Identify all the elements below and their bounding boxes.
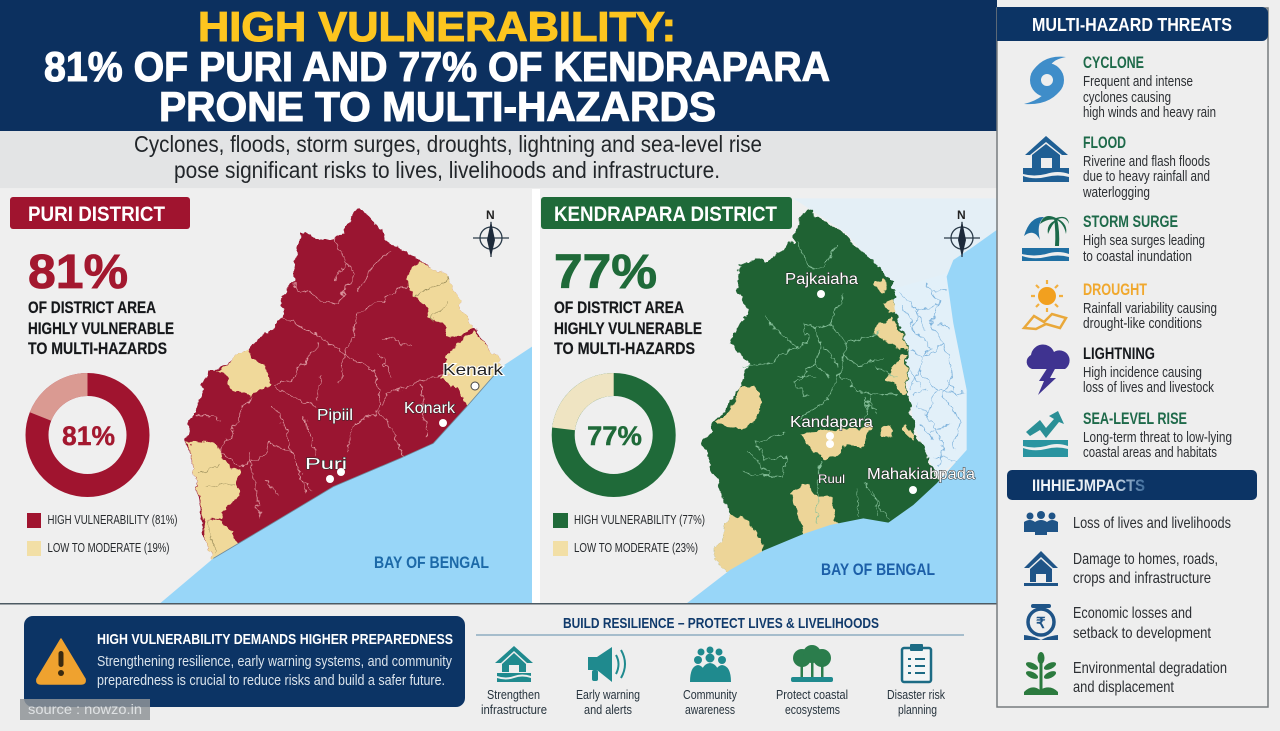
threat: sea-level rise: Long-term threat to low-lying bbox=[1083, 430, 1232, 446]
legend bbox=[553, 513, 705, 556]
threat: drought bbox=[1083, 281, 1217, 332]
subtitle band: Cyclones, floods, storm surges, droughts, lightning and sea-level rise bbox=[134, 131, 762, 157]
action: early warning: and alerts bbox=[584, 703, 632, 717]
icon: economic loss bbox=[1024, 604, 1058, 640]
threat: flood bbox=[1082, 134, 1210, 201]
threat: lightning: LIGHTNING bbox=[1083, 345, 1155, 363]
map labels: Pajkaiaha bbox=[785, 271, 858, 288]
icon: people bbox=[1024, 511, 1058, 535]
icon: economic loss: ₹ bbox=[1036, 615, 1046, 632]
legend: HIGH VULNERABILITY (81%) bbox=[48, 513, 178, 527]
icon: drought bbox=[1024, 280, 1066, 329]
callout: preparedness: preparedness is crucial to reduce risks and build a safer future. bbox=[97, 672, 445, 689]
map labels bbox=[785, 271, 975, 494]
threat: sea-level rise: coastal areas and habitats bbox=[1083, 445, 1217, 461]
callout: preparedness: Strengthening resilience, early warning systems, and community bbox=[97, 653, 452, 670]
impacts heading: IIHHIEJMPACTS bbox=[1032, 476, 1145, 495]
threat: flood: waterlogging bbox=[1082, 185, 1150, 201]
threat: storm surge bbox=[1083, 213, 1205, 265]
resilience heading: BUILD RESILIENCE – PROTECT LIVES & LIVELIHOODS bbox=[563, 615, 879, 632]
sea bbox=[687, 230, 997, 603]
threat: lightning bbox=[1083, 345, 1215, 396]
map labels: Puri bbox=[305, 456, 347, 473]
threat: drought: drought-like conditions bbox=[1083, 316, 1202, 332]
title bbox=[44, 3, 830, 130]
impact: environment: Environmental degradation bbox=[1073, 660, 1227, 677]
threat: lightning: High incidence causing bbox=[1083, 365, 1202, 381]
big stat: 77% bbox=[554, 246, 657, 299]
district badge: PURI DISTRICT bbox=[28, 203, 165, 226]
impact: damage: crops and infrastructure bbox=[1073, 570, 1211, 587]
threat: flood: Riverine and flash floods bbox=[1083, 154, 1210, 170]
sea label: BAY OF BENGAL bbox=[821, 560, 935, 579]
stat description: HIGHLY VULNERABLE bbox=[554, 319, 702, 338]
map labels: Kenark bbox=[443, 362, 504, 379]
legend bbox=[27, 513, 178, 556]
impact: economic bbox=[1073, 605, 1211, 642]
panel: Kendrapara district bbox=[532, 189, 997, 603]
Kendrapara map bbox=[687, 198, 997, 603]
impact: environment bbox=[1073, 660, 1227, 696]
action: community awareness: Community bbox=[683, 688, 738, 702]
district badge: KENDRAPARA DISTRICT bbox=[554, 203, 777, 226]
title: PRONE TO MULTI-HAZARDS bbox=[159, 83, 716, 130]
threat: storm surge: to coastal inundation bbox=[1083, 249, 1192, 265]
source watermark: source : nowzo.in bbox=[28, 701, 142, 717]
legend: HIGH VULNERABILITY (77%) bbox=[574, 513, 705, 527]
delta bbox=[890, 273, 967, 477]
threat: drought: DROUGHT bbox=[1083, 281, 1147, 299]
Puri map bbox=[160, 207, 532, 603]
donut chart: 81% bbox=[62, 421, 115, 451]
title: HIGH VULNERABILITY: bbox=[198, 3, 676, 50]
legend: LOW TO MODERATE (23%) bbox=[574, 541, 698, 555]
impact: economic: Economic losses and bbox=[1073, 605, 1192, 622]
impact: lives: Loss of lives and livelihoods bbox=[1073, 515, 1231, 532]
icon: lightning bbox=[1027, 345, 1070, 395]
icon: flood bbox=[1023, 136, 1069, 182]
top tint bbox=[793, 198, 997, 290]
icon: sea-level rise bbox=[1023, 411, 1068, 457]
sea bbox=[160, 347, 532, 603]
action: disaster risk planning: Disaster risk bbox=[887, 688, 946, 702]
impact: economic: setback to development bbox=[1073, 625, 1211, 642]
district badge bbox=[541, 197, 792, 229]
delta channels bbox=[900, 283, 963, 467]
stat description: OF DISTRICT AREA bbox=[554, 298, 684, 317]
compass: N bbox=[486, 208, 495, 222]
stat description: OF DISTRICT AREA bbox=[28, 298, 156, 317]
callout: preparedness: HIGH VULNERABILITY DEMANDS HIGHER PREPAREDNESS bbox=[97, 631, 453, 648]
impacts heading bbox=[1007, 470, 1257, 500]
threat: cyclone: CYCLONE bbox=[1083, 54, 1144, 72]
action: disaster risk planning bbox=[887, 644, 946, 717]
action: protect coastal ecosystems: ecosystems bbox=[785, 703, 840, 717]
icon: cyclone bbox=[1024, 57, 1066, 104]
map labels: Kandapara bbox=[790, 414, 873, 431]
action: disaster risk planning: planning bbox=[898, 703, 937, 717]
compass bbox=[944, 208, 980, 257]
action: strengthen infrastructure: Strengthen bbox=[487, 688, 540, 702]
action: protect coastal ecosystems bbox=[776, 645, 848, 717]
map labels: Ruul bbox=[818, 472, 845, 486]
subtitle band bbox=[0, 131, 997, 188]
threat: sea-level rise bbox=[1083, 410, 1232, 461]
threat: flood: due to heavy rainfall and bbox=[1083, 169, 1210, 185]
donut chart bbox=[563, 384, 664, 486]
stat description: TO MULTI-HAZARDS bbox=[554, 339, 695, 358]
threats heading bbox=[997, 7, 1268, 41]
compass bbox=[473, 208, 509, 257]
threat: storm surge: STORM SURGE bbox=[1083, 213, 1178, 231]
stat description: TO MULTI-HAZARDS bbox=[28, 339, 167, 358]
icon: storm surge bbox=[1022, 216, 1069, 261]
header banner bbox=[0, 0, 997, 131]
map labels bbox=[305, 362, 504, 483]
threat: sea-level rise: SEA-LEVEL RISE bbox=[1083, 410, 1187, 428]
action: community awareness bbox=[683, 646, 738, 717]
threat: cyclone: cyclones causing bbox=[1083, 90, 1171, 106]
action: strengthen infrastructure bbox=[481, 646, 547, 717]
sea label: BAY OF BENGAL bbox=[374, 553, 489, 572]
stat description: HIGHLY VULNERABLE bbox=[28, 319, 174, 338]
stat description bbox=[554, 298, 702, 358]
action: early warning: Early warning bbox=[576, 688, 640, 702]
donut chart bbox=[37, 384, 138, 486]
icon: plant bbox=[1024, 652, 1058, 695]
map labels: Pipiil bbox=[317, 407, 353, 424]
threats heading: MULTI-HAZARD THREATS bbox=[1032, 15, 1232, 35]
stat description bbox=[28, 298, 174, 358]
impact: environment: and displacement bbox=[1073, 679, 1174, 696]
threat: cyclone bbox=[1083, 54, 1216, 121]
action: protect coastal ecosystems: Protect coastal bbox=[776, 688, 848, 702]
action: community awareness: awareness bbox=[685, 703, 735, 717]
callout: preparedness bbox=[24, 616, 465, 707]
title: 81% OF PURI AND 77% OF KENDRAPARA bbox=[44, 43, 830, 90]
impact: damage: Damage to homes, roads, bbox=[1073, 551, 1218, 568]
map labels: Konark bbox=[404, 400, 456, 417]
subtitle band: pose significant risks to lives, livelihoods and infrastructure. bbox=[174, 157, 720, 183]
action: strengthen infrastructure: infrastructure bbox=[481, 703, 547, 717]
action: early warning bbox=[576, 647, 640, 717]
map labels: Mahakiabpada bbox=[867, 466, 975, 483]
threat: drought: Rainfall variability causing bbox=[1083, 301, 1217, 317]
land bbox=[703, 208, 942, 575]
big stat: 81% bbox=[28, 246, 128, 299]
source watermark bbox=[20, 699, 150, 720]
panel: multi-hazard threats bbox=[997, 7, 1268, 707]
compass: N bbox=[957, 208, 966, 222]
icon: warning bbox=[37, 639, 85, 684]
impact: damage bbox=[1073, 551, 1218, 587]
land bbox=[187, 207, 507, 563]
legend: LOW TO MODERATE (19%) bbox=[48, 541, 170, 555]
threat: storm surge: High sea surges leading bbox=[1083, 233, 1205, 249]
district badge bbox=[10, 197, 190, 229]
threat: lightning: loss of lives and livestock bbox=[1083, 380, 1215, 396]
threat: cyclone: Frequent and intense bbox=[1083, 74, 1193, 90]
donut chart: 77% bbox=[587, 421, 642, 451]
icon: damaged home bbox=[1024, 551, 1058, 586]
threat: flood: FLOOD bbox=[1083, 134, 1126, 152]
panel: Puri district bbox=[0, 189, 532, 603]
threat: cyclone: high winds and heavy rain bbox=[1083, 105, 1216, 121]
